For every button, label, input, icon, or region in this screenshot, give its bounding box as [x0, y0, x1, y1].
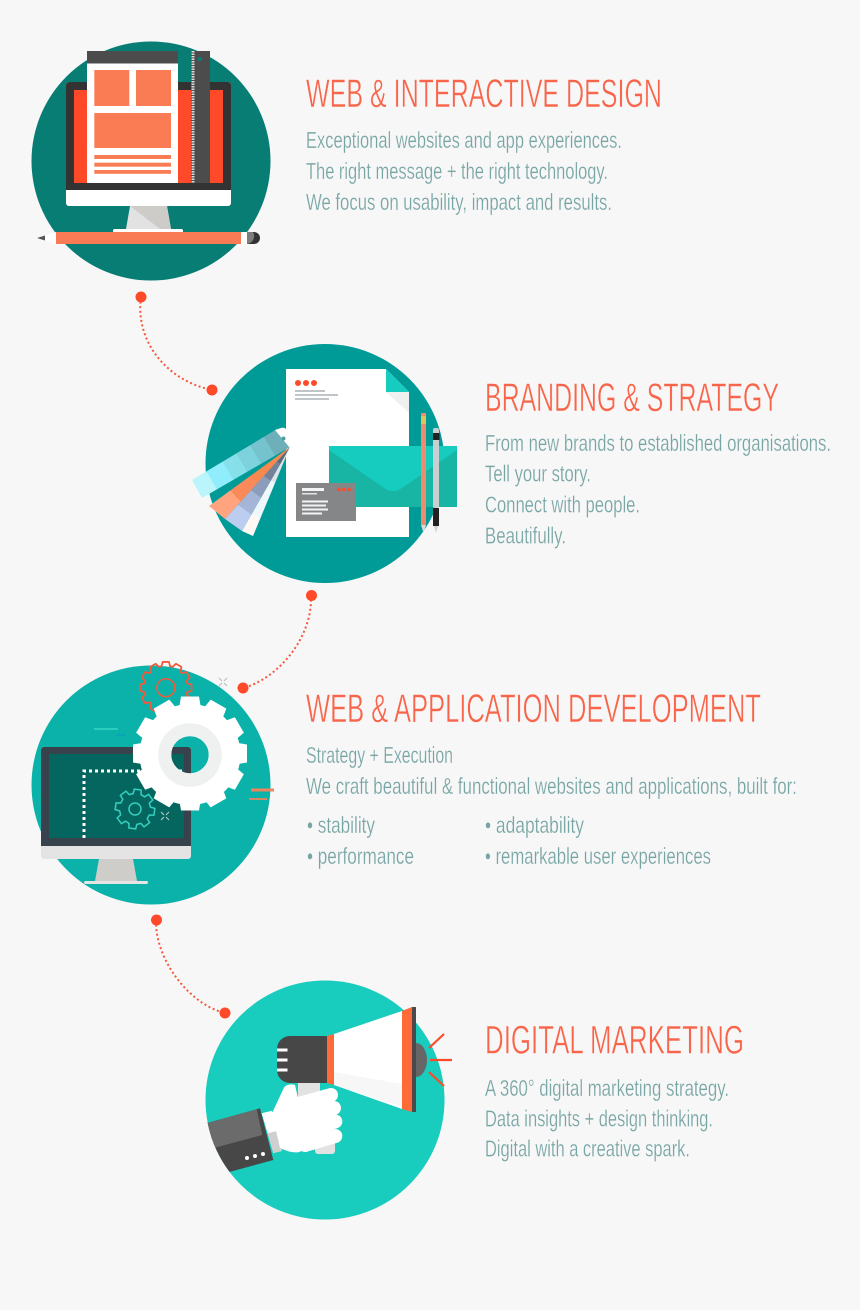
red outline gear	[140, 662, 192, 713]
ruler	[191, 51, 210, 183]
heading: web and interactive design: WEB & INTERACTIVE DESIGN	[306, 72, 662, 116]
pencil	[37, 232, 260, 244]
large white gear	[133, 696, 247, 810]
text block: digital marketing: A 360° digital marketing strategy.	[485, 1075, 729, 1101]
monitor	[41, 747, 191, 884]
text block: web and interactive design	[306, 127, 622, 215]
megaphone	[277, 1007, 427, 1112]
small gear hub	[129, 803, 141, 815]
text block: web and interactive design: We focus on usability, impact and results.	[306, 189, 612, 215]
sparkle mark	[219, 678, 227, 686]
business card	[296, 483, 356, 521]
sparkle mark on screen	[161, 812, 169, 820]
icon: marketing megaphone	[200, 980, 452, 1220]
motion lines	[94, 729, 274, 799]
text block: development intro	[306, 742, 797, 799]
envelope	[329, 446, 457, 507]
colour swatch fan	[192, 428, 295, 536]
monitor body	[66, 82, 231, 206]
bullet list: left column	[307, 812, 414, 869]
text block: branding and strategy	[485, 430, 831, 548]
webpage wireframe	[87, 51, 178, 183]
text block: branding and strategy: Tell your story.	[485, 461, 591, 487]
bullet list: left column: • stability	[307, 812, 375, 838]
text block: branding and strategy: Connect with people.	[485, 491, 640, 517]
bullet list: right column	[485, 812, 711, 869]
dotted selection frame	[84, 771, 184, 838]
icon: branding stationery	[192, 344, 457, 583]
monitor stand	[113, 206, 183, 233]
megaphone handle	[298, 1083, 335, 1154]
red gear hub	[157, 679, 175, 697]
text block: digital marketing: Digital with a creative spark.	[485, 1136, 690, 1162]
sleeve	[208, 1108, 274, 1172]
text block: development intro: Strategy + Execution	[306, 742, 453, 768]
bullet list: right column: • remarkable user experiences	[485, 843, 711, 869]
pencil	[421, 413, 426, 533]
text block: web and interactive design: The right message + the right technology.	[306, 158, 608, 184]
shirt cuff	[262, 1111, 282, 1153]
connector: branding to development	[238, 590, 317, 694]
small teal gear	[113, 787, 157, 831]
pen	[433, 428, 440, 533]
text block: branding and strategy: Beautifully.	[485, 522, 566, 548]
icon: web design monitor	[32, 42, 270, 280]
bullet list: right column: • adaptability	[485, 812, 584, 838]
letterhead page	[286, 369, 409, 537]
connector: design to branding	[136, 292, 218, 396]
sound lines	[429, 1034, 452, 1086]
icon: development gears and monitor	[32, 662, 274, 904]
text block: digital marketing: Data insights + design thinking.	[485, 1106, 713, 1132]
bullet list: left column: • performance	[307, 843, 414, 869]
connector: development to marketing	[151, 914, 230, 1018]
text block: digital marketing	[485, 1075, 729, 1162]
hand	[272, 1084, 335, 1152]
text block: web and interactive design: Exceptional websites and app experiences.	[306, 127, 622, 153]
